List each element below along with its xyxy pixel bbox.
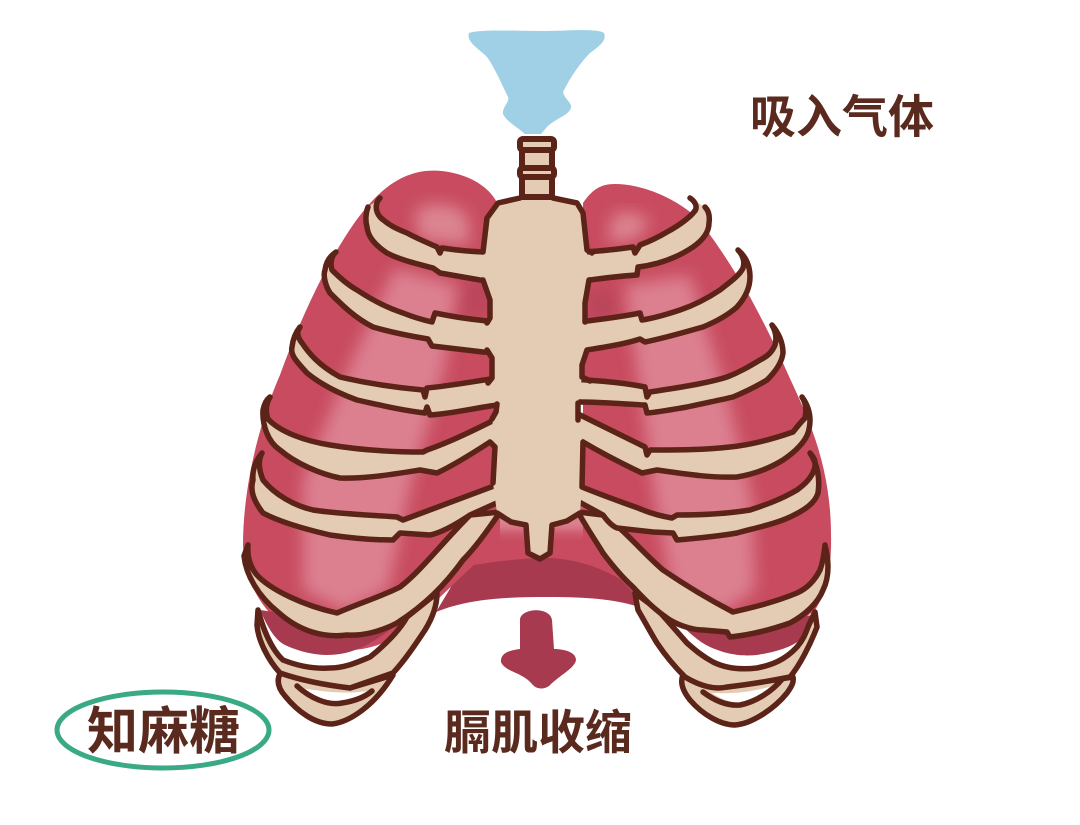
- left lung highlights: [303, 204, 495, 612]
- left rib 8: [278, 672, 393, 724]
- logo text: 知麻糖: [87, 703, 240, 760]
- left costal arch: [244, 512, 500, 636]
- left rib 4: [263, 397, 510, 478]
- right costal arch: [578, 512, 828, 637]
- lower tracheal ring: [520, 168, 554, 177]
- right rib 7: [635, 593, 817, 688]
- left rib 2: [324, 252, 510, 353]
- right rib 8 crescent: [712, 684, 778, 703]
- right rib 5: [570, 453, 819, 540]
- left lung: [243, 171, 500, 651]
- diaphragm band: [436, 558, 642, 612]
- right rib 4: [570, 397, 810, 477]
- sternum: [483, 197, 592, 559]
- right rib 3: [570, 325, 783, 413]
- left rib 8 crescent: [300, 688, 372, 703]
- left rib 3: [292, 327, 510, 415]
- arrow: diaphragm moves down: [501, 610, 576, 688]
- diaphragm light top: [480, 512, 600, 530]
- label: diaphragm contraction: 膈肌收缩: [444, 706, 632, 759]
- right lung: [583, 184, 831, 635]
- upper tracheal ring: [520, 139, 554, 150]
- right rib 1: [570, 198, 709, 281]
- sternum outlines: [483, 198, 592, 559]
- left rib 8 inner line: [297, 686, 372, 704]
- right rib 2: [570, 250, 750, 351]
- left rib 7: [257, 593, 437, 688]
- logo ellipse: [57, 692, 269, 768]
- right lung highlights: [588, 212, 755, 615]
- trachea: [520, 139, 554, 197]
- left lower lobe: [260, 590, 425, 655]
- right lower lobe: [660, 600, 815, 655]
- left rib 1: [366, 198, 510, 281]
- air funnel: [469, 30, 605, 134]
- center diaphragm: [436, 505, 642, 612]
- right rib 8 inner line: [703, 678, 783, 705]
- right rib 8: [682, 675, 793, 725]
- left rib 5: [252, 453, 510, 540]
- label: inhale: 吸入气体: [750, 91, 934, 143]
